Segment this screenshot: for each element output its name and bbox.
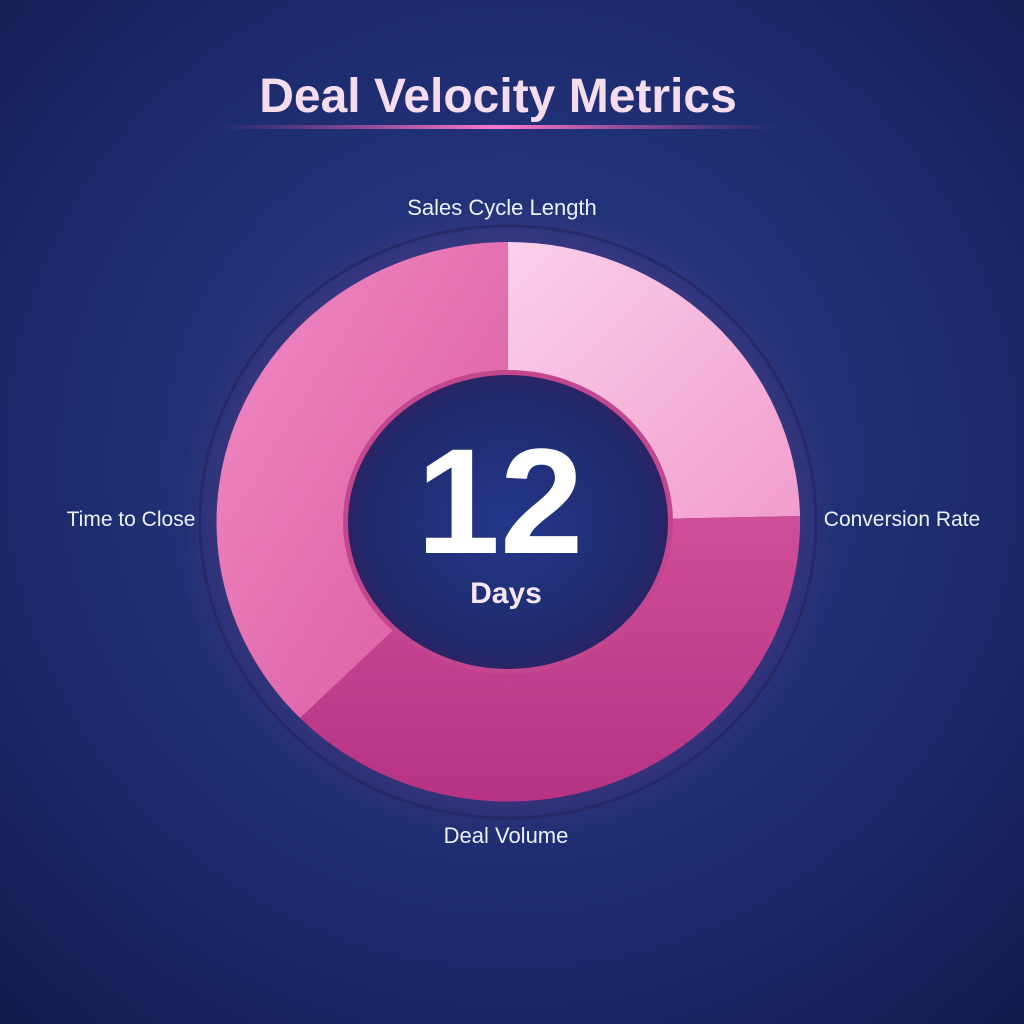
- outer faint ring: [200, 226, 816, 818]
- segment: light upper right: [508, 242, 800, 522]
- donut chart: [217, 242, 800, 802]
- title: Deal Velocity Metrics: [259, 70, 737, 123]
- label: conversion rate: Conversion Rate: [824, 508, 980, 531]
- segment: bottom: [300, 516, 800, 802]
- label: deal volume: Deal Volume: [444, 823, 568, 848]
- hole: [343, 370, 673, 674]
- label: sales cycle length: Sales Cycle Length: [407, 195, 597, 220]
- center value: 12: [417, 417, 583, 585]
- label: time to close: Time to Close: [67, 508, 195, 531]
- center value: Days: [470, 577, 542, 610]
- segment: left: [217, 242, 508, 718]
